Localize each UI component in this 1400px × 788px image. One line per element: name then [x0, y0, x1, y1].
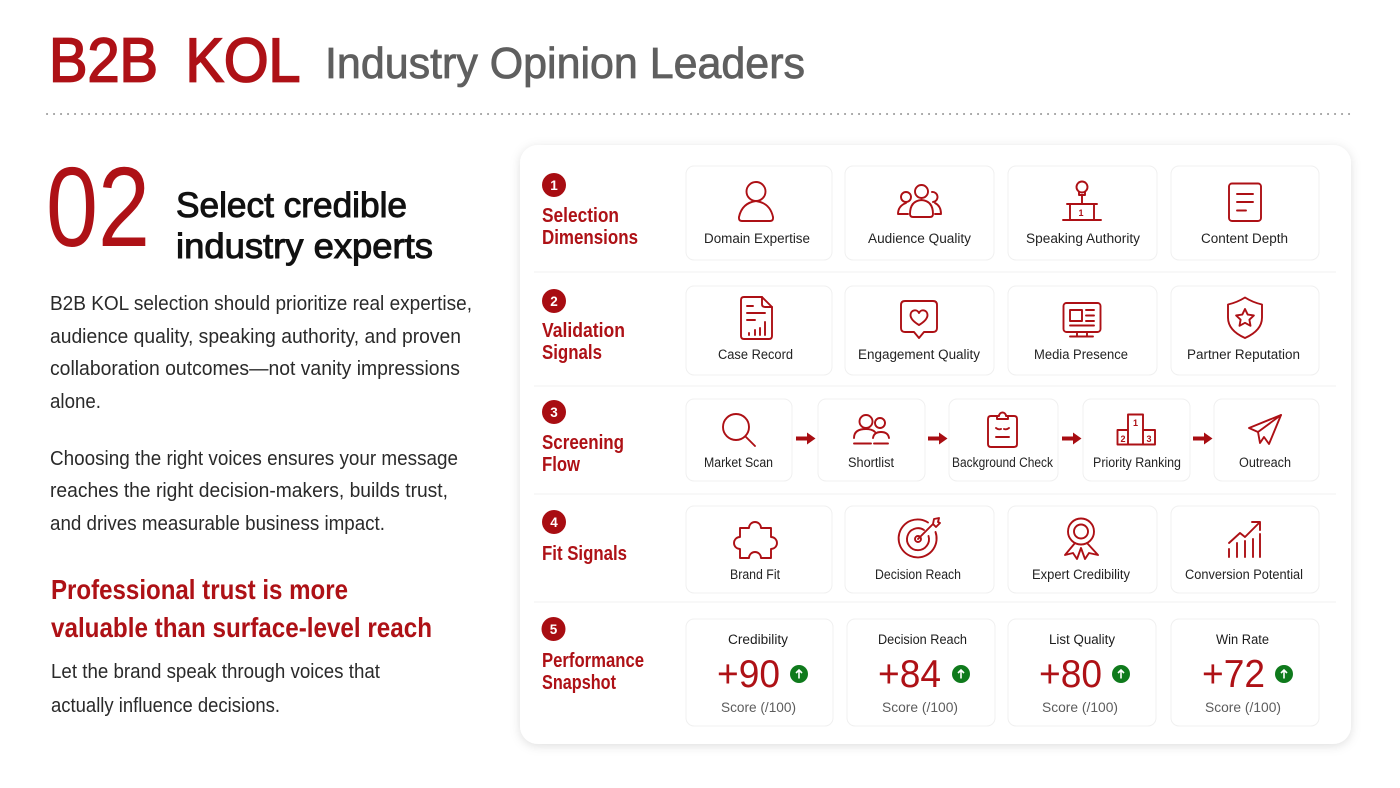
- card: conversion potential: [1171, 506, 1319, 593]
- row 5: performance snapshot: [542, 617, 1319, 726]
- arrow 3: [1062, 432, 1082, 444]
- metric: win rate: [1171, 619, 1319, 726]
- title: B2B KOL: KOL: [186, 26, 300, 96]
- row 4 heading: [542, 510, 627, 565]
- card: content depth: [1171, 166, 1319, 260]
- arrow 2: [928, 432, 948, 444]
- section number 02: 02: [46, 144, 150, 270]
- section heading: industry experts: [176, 227, 433, 266]
- card: decision reach: [845, 506, 994, 593]
- card: expert credibility: [1008, 506, 1157, 593]
- red callout: [51, 574, 432, 643]
- card: outreach: [1214, 399, 1319, 481]
- metric: decision reach: Score (/100): [882, 699, 958, 715]
- card: media presence: [1008, 286, 1157, 375]
- card: media presence: Media Presence: [1034, 347, 1128, 362]
- card: shortlist: [818, 399, 925, 481]
- card: priority ranking: 1: [1133, 418, 1138, 428]
- card: shortlist: Shortlist: [848, 455, 894, 470]
- row 4 heading: 4: [550, 515, 558, 530]
- metric: list quality: [1008, 619, 1156, 726]
- card: brand fit: Brand Fit: [730, 567, 780, 582]
- subtitle: Industry Opinion Leaders: [325, 39, 805, 88]
- card: speaking authority: 1: [1078, 208, 1084, 218]
- row 3: screening flow: [542, 399, 1319, 481]
- row 1: selection dimensions: [542, 166, 1319, 260]
- paragraph one: collaboration outcomes—not vanity impressions: [50, 358, 460, 380]
- paragraph two: reaches the right decision-makers, builds trust,: [50, 480, 448, 502]
- metric: credibility: Score (/100): [721, 699, 796, 715]
- card: priority ranking: 2: [1120, 434, 1126, 444]
- metric: credibility: Credibility: [728, 632, 788, 647]
- metric: credibility: [686, 619, 833, 726]
- metric: list quality: List Quality: [1049, 632, 1115, 647]
- card: case record: Case Record: [718, 347, 793, 362]
- closing text: Let the brand speak through voices that: [51, 661, 380, 683]
- card: partner reputation: [1171, 286, 1319, 375]
- paragraph two: [50, 448, 458, 535]
- row 2 heading: Signals: [542, 342, 602, 364]
- metric: decision reach: [847, 619, 995, 726]
- card: priority ranking: Priority Ranking: [1093, 455, 1181, 470]
- row 3 heading: Screening: [542, 432, 624, 454]
- row 1 heading: [542, 173, 638, 249]
- title: B2B KOL: B2B: [49, 26, 158, 96]
- card: background check: Background Check: [952, 455, 1053, 470]
- metric: win rate: +72: [1202, 653, 1265, 696]
- closing text: actually influence decisions.: [51, 695, 280, 717]
- card: audience quality: Audience Quality: [868, 231, 971, 246]
- card: audience quality: [845, 166, 994, 260]
- row 1 heading: Selection: [542, 205, 619, 227]
- left column: section intro: [46, 144, 472, 717]
- row 3 heading: 3: [550, 405, 558, 420]
- metric: list quality: Score (/100): [1042, 699, 1118, 715]
- row 1 heading: 1: [550, 178, 558, 193]
- red callout: valuable than surface-level reach: [51, 612, 432, 643]
- row 4: fit signals: [542, 506, 1319, 593]
- metric: decision reach: Decision Reach: [878, 632, 967, 647]
- card: market scan: [686, 399, 792, 481]
- row 5 heading: Performance: [542, 650, 644, 672]
- card: speaking authority: Speaking Authority: [1026, 231, 1140, 246]
- section heading: [176, 186, 433, 266]
- card: engagement quality: Engagement Quality: [858, 347, 980, 362]
- section heading: Select credible: [176, 186, 407, 225]
- card: domain expertise: Domain Expertise: [704, 231, 810, 246]
- row 3 heading: [542, 400, 624, 476]
- card: engagement quality: [845, 286, 994, 375]
- title: [49, 26, 805, 96]
- card: conversion potential: Conversion Potential: [1185, 567, 1303, 582]
- row 5 heading: 5: [550, 622, 558, 637]
- row 1 heading: Dimensions: [542, 227, 638, 249]
- card: case record: [686, 286, 832, 375]
- row 5 heading: [542, 617, 644, 694]
- paragraph two: and drives measurable business impact.: [50, 513, 385, 535]
- card: expert credibility: Expert Credibility: [1032, 567, 1130, 582]
- metric: win rate: Score (/100): [1205, 699, 1281, 715]
- card: speaking authority: [1008, 166, 1157, 260]
- card: decision reach: Decision Reach: [875, 567, 961, 582]
- paragraph one: [50, 293, 472, 413]
- metric: win rate: Win Rate: [1216, 632, 1269, 647]
- paragraph one: audience quality, speaking authority, and proven: [50, 326, 461, 348]
- row 2: validation signals: [542, 286, 1319, 375]
- metric: decision reach: +84: [878, 653, 941, 696]
- card: partner reputation: Partner Reputation: [1187, 347, 1300, 362]
- row 3 heading: Flow: [542, 454, 580, 476]
- card: domain expertise: [686, 166, 832, 260]
- metric: list quality: +80: [1039, 653, 1102, 696]
- card: priority ranking: 3: [1146, 434, 1152, 444]
- red callout: Professional trust is more: [51, 574, 348, 605]
- row 4 heading: Fit Signals: [542, 543, 627, 565]
- paragraph one: B2B KOL selection should prioritize real expertise,: [50, 293, 472, 315]
- row 5 heading: Snapshot: [542, 672, 616, 694]
- row 2 heading: Validation: [542, 320, 625, 342]
- card: market scan: Market Scan: [704, 455, 773, 470]
- row 2 heading: [542, 289, 625, 364]
- card: content depth: Content Depth: [1201, 231, 1288, 246]
- panel: selection framework: [520, 145, 1351, 744]
- paragraph one: alone.: [50, 391, 101, 413]
- card: background check: [949, 399, 1058, 481]
- arrow 4: [1193, 432, 1212, 444]
- closing text: [51, 661, 380, 717]
- paragraph two: Choosing the right voices ensures your message: [50, 448, 458, 470]
- arrow 1: [796, 432, 816, 444]
- metric: credibility: +90: [717, 653, 780, 696]
- row 2 heading: 2: [550, 294, 558, 309]
- card: outreach: Outreach: [1239, 455, 1291, 470]
- card: brand fit: [686, 506, 832, 593]
- card: priority ranking: [1083, 399, 1190, 481]
